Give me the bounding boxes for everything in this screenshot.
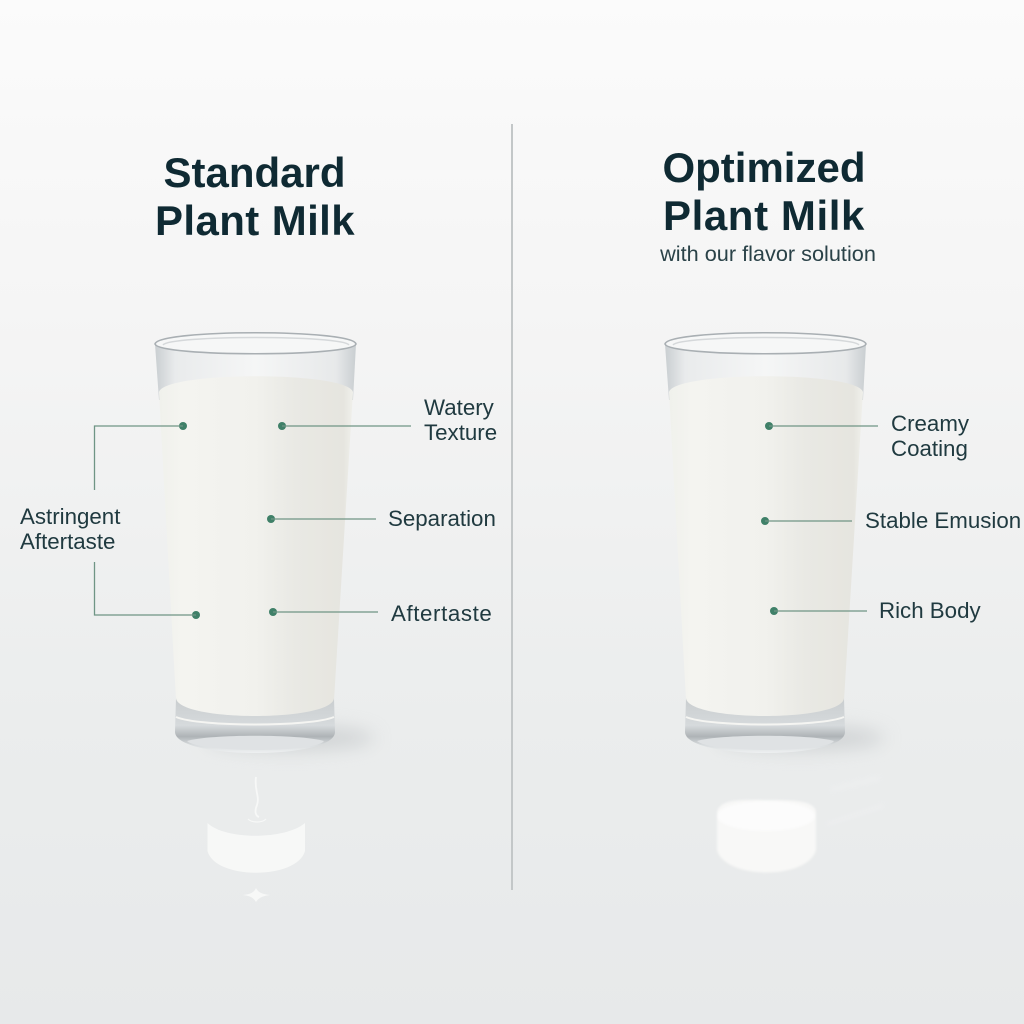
- callout: astringent aftertaste: [20, 422, 200, 619]
- callout: separation: Separation: [388, 506, 496, 531]
- callout: rich body: Rich Body: [879, 598, 981, 623]
- heading: optimized plant milk: Plant Milk: [663, 192, 865, 239]
- callout: aftertaste: Aftertaste: [391, 601, 492, 626]
- callout: astringent aftertaste: Astringent: [20, 504, 121, 529]
- callout: stable emulsion: [761, 508, 1021, 533]
- callout: separation: [267, 506, 496, 531]
- heading: standard plant milk: Standard: [163, 149, 346, 196]
- icon: watery puck with steam: [208, 777, 305, 902]
- heading: optimized plant milk: Optimized: [662, 144, 866, 191]
- callout: astringent aftertaste: Aftertaste: [20, 529, 115, 554]
- callout: creamy coating: Creamy: [891, 411, 970, 436]
- callout: aftertaste: [269, 601, 492, 626]
- callout: creamy coating: Coating: [891, 436, 968, 461]
- callout: watery texture: [278, 395, 497, 445]
- callout: stable emulsion: Stable Emusion: [865, 508, 1021, 533]
- right glass of milk: [665, 333, 885, 753]
- callout: watery texture: Texture: [424, 420, 497, 445]
- icon: creamy puck: [717, 800, 816, 872]
- heading: standard plant milk: Plant Milk: [155, 197, 355, 244]
- subheading: with our flavor solution: [659, 241, 876, 266]
- callout: watery texture: Watery: [424, 395, 495, 420]
- left glass of milk: [155, 333, 375, 753]
- callout: creamy coating: [765, 411, 970, 461]
- callout: rich body: [770, 598, 981, 623]
- marble veins: [825, 778, 885, 825]
- center divider: [511, 124, 513, 890]
